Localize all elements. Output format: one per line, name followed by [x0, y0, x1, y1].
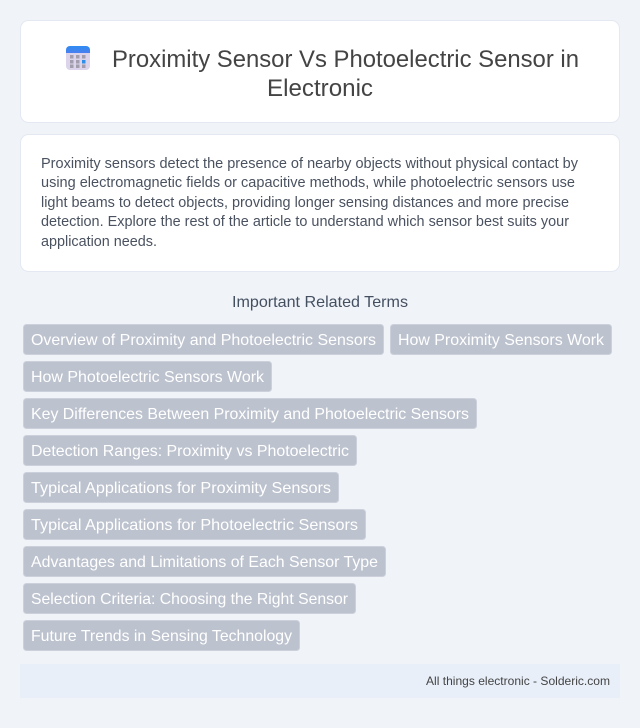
tag: how photoelectric sensors work: How Photoelectric Sensors Work: [31, 369, 265, 386]
tag: applications photoelectric: Typical Applications for Photoelectric Sensors: [31, 517, 358, 534]
tag: applications proximity: [24, 472, 338, 502]
tag: overview: [24, 324, 384, 354]
tag: key differences: [24, 398, 476, 428]
tag: applications photoelectric: [24, 510, 366, 540]
tag: selection criteria: Selection Criteria: Choosing the Right Sensor: [31, 591, 349, 608]
tag: advantages and limitations: Advantages and Limitations of Each Sensor Type: [31, 554, 378, 571]
tag: detection ranges: Detection Ranges: Proximity vs Photoelectric: [31, 443, 349, 460]
tag: detection ranges: [24, 436, 356, 466]
tag: overview: Overview of Proximity and Photoelectric Sensors: [31, 332, 376, 349]
tag: key differences: Key Differences Between Proximity and Photoelectric Sensors: [31, 406, 469, 423]
description text: detection. Explore the rest of the article to understand which sensor best suits your: [41, 214, 569, 230]
tag: how proximity sensors work: [390, 324, 612, 354]
tag: applications proximity: Typical Applications for Proximity Sensors: [31, 480, 331, 497]
tag: how photoelectric sensors work: [24, 362, 272, 392]
description text: Proximity sensors detect the presence of nearby objects without physical contact by: [41, 156, 579, 172]
footer: [20, 664, 620, 698]
tag: how proximity sensors work: How Proximity Sensors Work: [398, 332, 605, 349]
title: Electronic: [267, 75, 373, 102]
tag: advantages and limitations: [24, 546, 386, 576]
related term tags: [24, 324, 612, 650]
header panel: [20, 20, 620, 122]
tag: future trends: Future Trends in Sensing Technology: [31, 628, 292, 645]
icon: calendar: [66, 46, 90, 70]
description text: [41, 156, 579, 250]
title: [112, 46, 579, 102]
description panel: [20, 134, 620, 272]
tag: selection criteria: [24, 584, 356, 614]
description text: using electromagnetic fields or capacitive methods, while photoelectric sensors use: [41, 175, 575, 191]
description text: application needs.: [41, 234, 157, 250]
section heading: Important Related Terms: [232, 294, 408, 311]
tag: future trends: [24, 620, 300, 650]
footer text: All things electronic - Solderic.com: [426, 674, 610, 688]
description text: light beams to detect objects, providing longer sensing distances and more precise: [41, 195, 569, 211]
title: Proximity Sensor Vs Photoelectric Sensor in: [112, 46, 579, 73]
